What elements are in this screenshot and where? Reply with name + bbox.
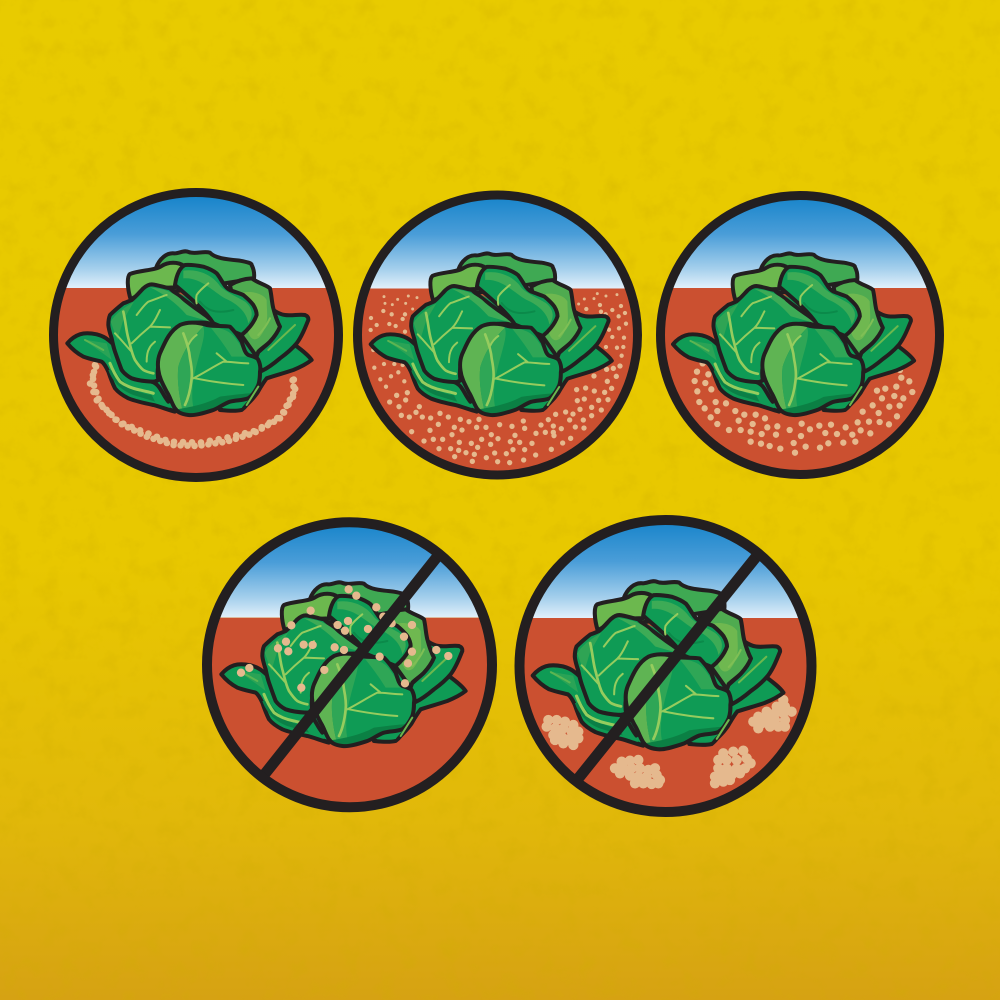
badge 5 ring bbox=[520, 520, 812, 812]
badge 4 dots on leaves bbox=[241, 589, 448, 688]
badge 3 dots bbox=[695, 363, 912, 453]
badge 2 lettuce bbox=[371, 253, 612, 416]
badge 1 ring bbox=[54, 192, 338, 478]
badge 2 ring bbox=[358, 195, 638, 475]
badge 3 lettuce bbox=[673, 253, 914, 416]
badge 4 prohibition slash bbox=[264, 557, 437, 775]
badge 4 lettuce bbox=[221, 582, 466, 747]
badge 5 lettuce bbox=[533, 581, 783, 750]
badge 2 scattered dots bbox=[371, 294, 626, 463]
badge 3: fertiliser in a wide band under the lettuce bbox=[656, 190, 946, 480]
badge 1 lettuce bbox=[67, 251, 312, 416]
badge 5 sky and soil bbox=[524, 525, 806, 807]
badge 3 sky and soil bbox=[665, 200, 935, 470]
badge 1 fertiliser ring bbox=[90, 365, 296, 446]
badge 4 ring bbox=[207, 522, 492, 807]
badge 1: fertiliser band around the lettuce bbox=[50, 190, 342, 482]
badge 5 fertiliser clumps bbox=[547, 700, 792, 784]
badge 4 sky and soil bbox=[212, 527, 487, 802]
badge 4: prohibited, fertiliser on the leaves bbox=[202, 517, 498, 814]
badge 2 sky and soil bbox=[362, 200, 633, 470]
badge 2: fertiliser scattered across the soil bbox=[353, 190, 643, 480]
badge 1 sky and soil bbox=[58, 197, 334, 473]
badge 5: prohibited, fertiliser in clumps bbox=[515, 515, 817, 818]
badge 5 prohibition slash bbox=[577, 557, 756, 780]
badge 3 ring bbox=[660, 196, 940, 474]
